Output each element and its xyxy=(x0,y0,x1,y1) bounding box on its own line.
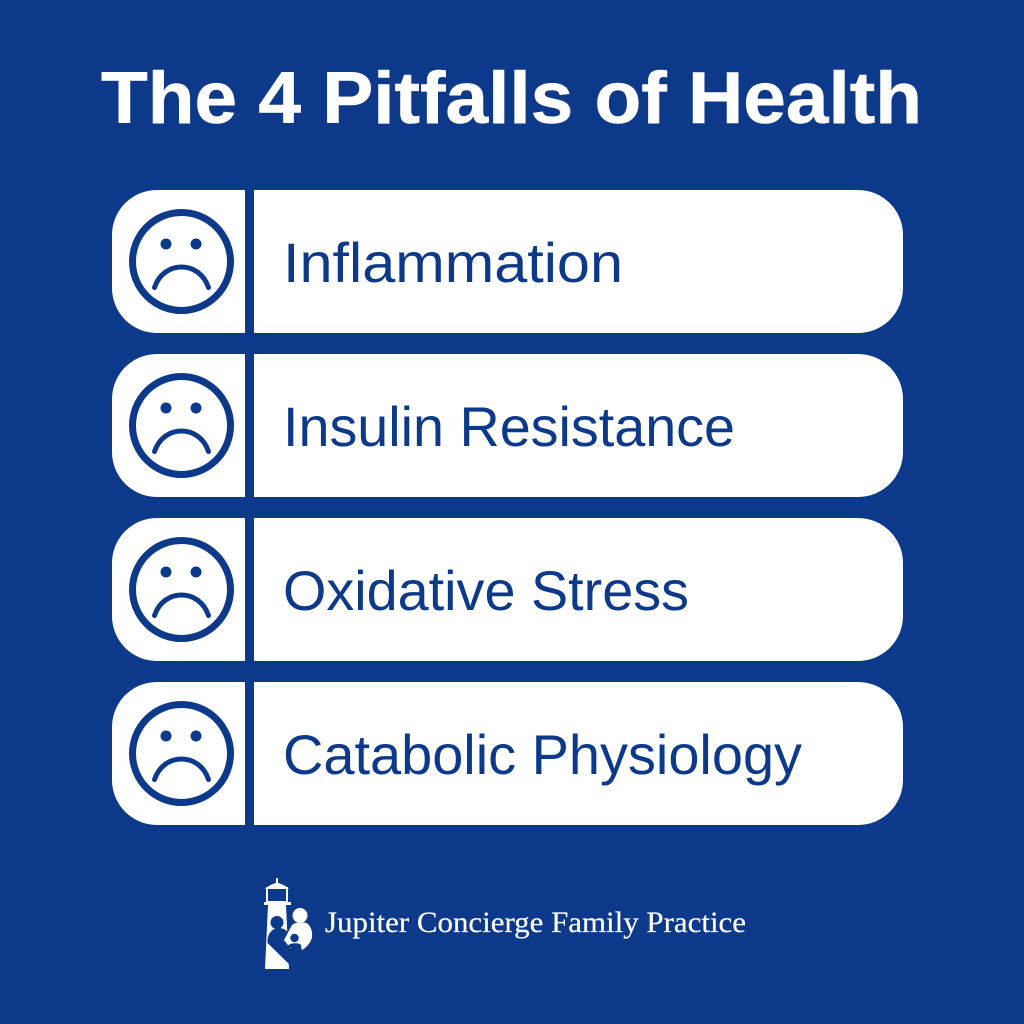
panel: Oxidative Stress row xyxy=(112,518,903,661)
label: Catabolic Physiology: Catabolic Physiology xyxy=(283,723,802,786)
panel: Catabolic Physiology row xyxy=(112,682,903,825)
icon: sad face xyxy=(132,704,230,802)
title: The 4 Pitfalls of Health xyxy=(101,58,922,139)
panel: Insulin Resistance row xyxy=(112,354,903,497)
icon: lighthouse with family xyxy=(264,878,312,969)
panel: Inflammation row xyxy=(112,190,903,333)
text: practice name: Jupiter Concierge Family Practice xyxy=(325,906,746,939)
icon: sad face xyxy=(132,376,230,474)
label: Oxidative Stress: Oxidative Stress xyxy=(283,559,689,622)
icon: sad face xyxy=(132,212,230,310)
label: Insulin Resistance: Insulin Resistance xyxy=(283,395,735,458)
icon: sad face xyxy=(132,540,230,638)
logo: lighthouse and practice name xyxy=(264,878,746,969)
label: Inflammation: Inflammation xyxy=(283,231,623,294)
